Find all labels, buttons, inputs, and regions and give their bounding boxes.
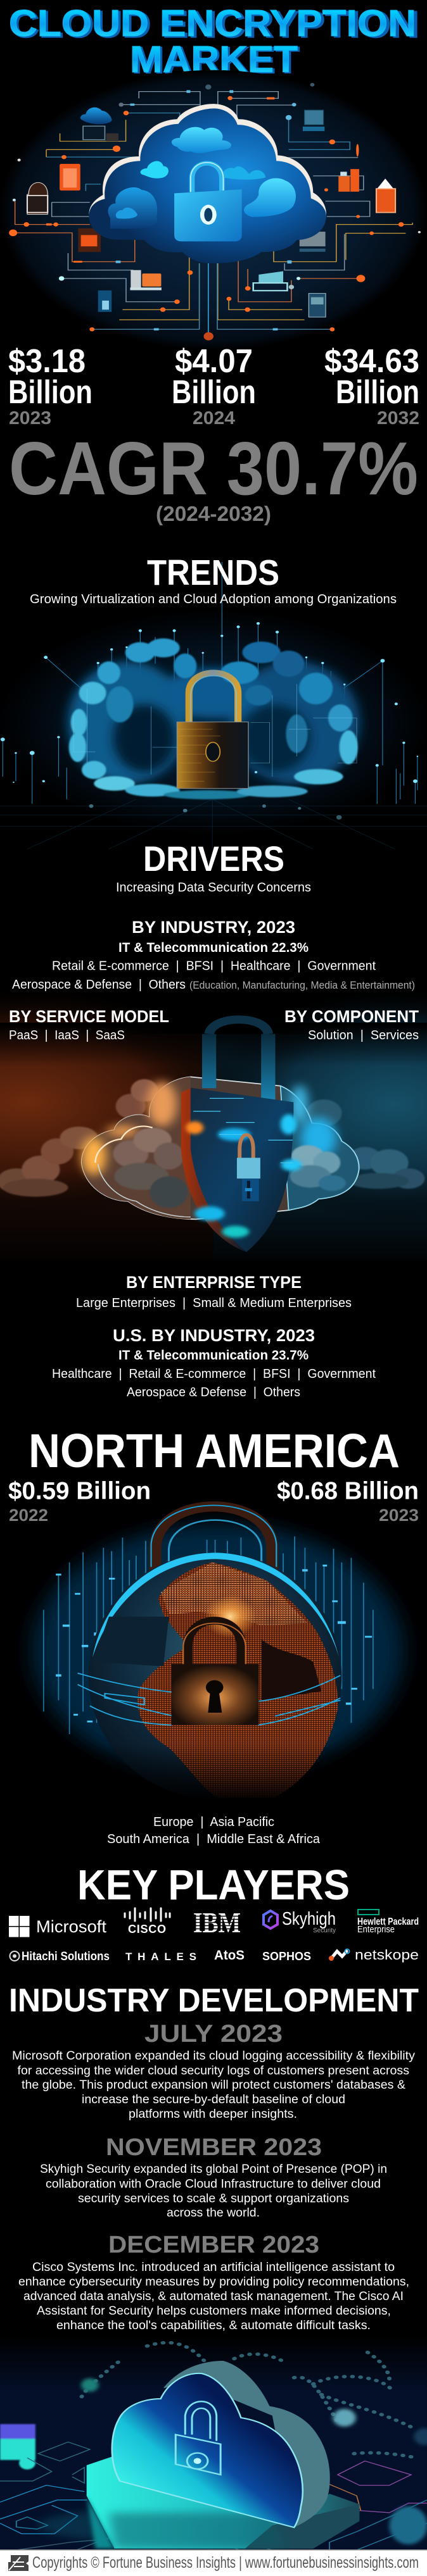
glass cloud <box>82 1077 359 1219</box>
logo: Cisco <box>125 1908 170 1935</box>
glowing base <box>87 2457 359 2549</box>
2024 market size <box>172 343 256 428</box>
by industry 2023: IT & Telecommunication 22.3% <box>118 941 309 955</box>
bokeh trails <box>82 2342 417 2458</box>
circuit overlay <box>73 684 357 777</box>
cloud padlock outline <box>175 2401 220 2475</box>
logo: Hitachi Solutions: Hitachi Solutions <box>22 1950 110 1963</box>
development: December 2023: enhance the tool's capabilities, & automate difficult tasks. <box>56 2319 371 2332</box>
cloud side <box>163 2361 330 2527</box>
development: November 2023 <box>40 2134 387 2220</box>
by service model <box>9 1007 169 1042</box>
key player logos <box>9 1907 419 1963</box>
2032 market size: $34.63 <box>324 343 419 380</box>
small device icons <box>27 108 395 317</box>
footer <box>0 2549 427 2576</box>
bottom illustration: glowing cloud padlock on circuit board <box>0 2335 427 2550</box>
2023 market size: Billion <box>8 374 92 411</box>
by industry 2023 <box>12 918 415 992</box>
title: CLOUD ENCRYPTION <box>11 4 419 46</box>
logo: Thales: THALES <box>125 1951 196 1963</box>
cloud face <box>112 2373 303 2527</box>
2024 market size: 2024 <box>193 408 235 428</box>
circuit board lines <box>0 2442 427 2550</box>
development: December 2023: Assistant for Security helps customers make informed decisions, <box>37 2304 391 2318</box>
other regions: Europe | Asia Pacific <box>153 1815 274 1829</box>
development: November 2023: security services to scale & support organizations <box>78 2192 349 2205</box>
development: July 2023: Microsoft Corporation expanded its cloud logging accessibility & flexibility <box>12 2049 416 2063</box>
by component <box>284 1007 419 1042</box>
2023 regional value: 2023 <box>379 1506 419 1525</box>
circuit nodes <box>9 96 404 341</box>
logo: Hewlett Packard Enterprise: Enterprise <box>357 1924 395 1935</box>
2032 market size: 2032 <box>377 408 419 428</box>
2023 regional value <box>277 1477 419 1525</box>
key figures <box>8 343 419 428</box>
2032 market size <box>324 343 419 428</box>
data streams <box>44 1536 373 1734</box>
main padlock <box>192 163 222 192</box>
development: July 2023: the globe. This product expansion will protect customers' databases & <box>22 2079 405 2092</box>
development: December 2023: enhance cybersecurity measures by providing policy recommendations, <box>18 2275 409 2289</box>
development: July 2023: increase the secure-by-default baseline of cloud <box>82 2093 345 2106</box>
logo: Cisco: CISCO <box>128 1923 166 1935</box>
by enterprise type: BY ENTERPRISE TYPE <box>126 1273 302 1292</box>
shield padlock <box>239 1135 253 1158</box>
faint floor grid <box>0 799 427 849</box>
2024 market size: Billion <box>172 374 256 411</box>
padlock <box>189 673 238 723</box>
other regions: South America | Middle East & Africa <box>107 1832 321 1846</box>
by service model: PaaS | IaaS | SaaS <box>9 1029 125 1042</box>
development: July 2023: for accessing the wider cloud security logs of customers present across <box>18 2064 409 2077</box>
development: December 2023: DECEMBER 2023 <box>108 2232 319 2258</box>
industry development heading: INDUSTRY DEVELOPMENT <box>9 1982 419 2019</box>
dark cloud interior <box>113 704 310 772</box>
other regions <box>107 1815 321 1846</box>
development: November 2023: Skyhigh Security expanded its global Point of Presence (POP) in <box>40 2163 387 2176</box>
development: November 2023: NOVEMBER 2023 <box>106 2134 322 2161</box>
development: July 2023 <box>12 2020 416 2121</box>
title: MARKET <box>132 39 300 81</box>
logo: Atos: AtoS <box>214 1948 245 1963</box>
title: MARKET <box>130 39 298 80</box>
trends illustration: gold padlock in blue data cloud <box>0 562 427 849</box>
globe <box>89 1553 341 1799</box>
trends heading <box>30 553 397 606</box>
cloud glows <box>82 1082 336 1175</box>
shield body <box>181 1088 246 1252</box>
U.S. by industry: Healthcare | Retail & E-commerce | BFSI | Government <box>52 1367 376 1381</box>
logo: Skyhigh Security: Skyhigh <box>282 1909 336 1929</box>
shackle <box>209 1034 268 1102</box>
U.S. by industry <box>52 1326 376 1399</box>
north america <box>8 1424 419 1525</box>
title: CLOUD ENCRYPTION <box>9 3 416 44</box>
logo: Netskope <box>329 1947 419 1963</box>
globe data bands <box>77 1673 340 1725</box>
development: July 2023: JULY 2023 <box>144 2020 283 2048</box>
2022 regional value: 2022 <box>9 1506 48 1525</box>
globe illustration with padlock <box>0 1505 427 1802</box>
left glowing block <box>0 2424 35 2470</box>
logo: Skyhigh Security: Security <box>313 1927 336 1934</box>
title <box>9 3 419 81</box>
CAGR: (2024-2032) <box>156 502 271 525</box>
by industry 2023: BY INDUSTRY, 2023 <box>132 918 295 937</box>
logo: Sophos: SOPHOS <box>262 1950 311 1963</box>
data lines <box>3 562 417 804</box>
by enterprise type: Large Enterprises | Small & Medium Enterprises <box>76 1296 352 1310</box>
development: November 2023: across the world. <box>167 2206 260 2220</box>
main cloud <box>89 104 326 238</box>
logo: Microsoft <box>9 1916 106 1937</box>
blue glow <box>33 1524 403 1777</box>
padlock <box>188 1620 241 1665</box>
continents <box>137 1563 338 1798</box>
logo: Microsoft: Microsoft <box>36 1917 106 1936</box>
inner small clouds <box>108 127 296 229</box>
soft cloud body <box>68 661 359 784</box>
shield illustration: cloud with orange and blue glow <box>0 984 427 1272</box>
glowing nodes <box>1 622 418 820</box>
by service model: BY SERVICE MODEL <box>9 1007 169 1026</box>
smoke clouds <box>0 1079 424 1197</box>
2023 market size <box>8 343 92 428</box>
by component: BY COMPONENT <box>284 1007 419 1026</box>
hero illustration: cloud padlock with circuit traces <box>0 70 427 351</box>
2023 market size: $3.18 <box>8 343 86 380</box>
development: December 2023: advanced data analysis, & automated task management. The Cisco AI <box>23 2290 404 2303</box>
drivers heading <box>116 839 311 895</box>
by component: Solution | Services <box>308 1029 419 1042</box>
big shackle <box>155 1506 272 1576</box>
by industry 2023: (Education, Manufacturing, Media & Entertainment) <box>189 979 415 991</box>
key players heading: KEY PLAYERS <box>77 1861 350 1909</box>
logo: Hewlett Packard Enterprise <box>357 1910 419 1935</box>
logo: Skyhigh Security <box>264 1909 336 1934</box>
U.S. by industry: IT & Telecommunication 23.7% <box>118 1348 309 1363</box>
2022 regional value <box>8 1477 151 1525</box>
lit cloud edges <box>69 639 358 799</box>
north america: NORTH AMERICA <box>29 1424 400 1477</box>
development: November 2023: collaboration with Oracle Cloud Infrastructure to deliver cloud <box>46 2177 381 2191</box>
logo: Netskope: netskope <box>355 1947 419 1963</box>
by industry 2023: Retail & E-commerce | BFSI | Healthcare | Government <box>52 960 376 973</box>
2022 regional value: $0.59 Billion <box>8 1477 151 1505</box>
by industry 2023: Aerospace & Defense | Others <box>12 978 186 992</box>
trends heading: TRENDS <box>147 553 279 593</box>
logo: IBM: IBM <box>193 1907 241 1939</box>
U.S. by industry: U.S. BY INDUSTRY, 2023 <box>113 1326 315 1345</box>
development: December 2023: Cisco Systems Inc. introduced an artificial intelligence assistant to <box>32 2261 395 2274</box>
by enterprise type <box>76 1273 352 1310</box>
logo: Fortune Business Insights <box>8 2555 29 2571</box>
U.S. by industry: Aerospace & Defense | Others <box>127 1385 300 1399</box>
development: December 2023 <box>18 2232 409 2332</box>
drivers heading: DRIVERS <box>143 839 284 878</box>
drivers heading: Increasing Data Security Concerns <box>116 881 311 895</box>
2023 regional value: $0.68 Billion <box>277 1477 419 1505</box>
trends heading: Growing Virtualization and Cloud Adoption among Organizations <box>30 592 397 606</box>
2024 market size: $4.07 <box>175 343 253 380</box>
cloud puffs inside glass <box>113 1128 346 1208</box>
circuit traces <box>13 92 412 337</box>
development: July 2023: platforms with deeper insights. <box>129 2108 297 2121</box>
2023 market size: 2023 <box>9 408 51 428</box>
